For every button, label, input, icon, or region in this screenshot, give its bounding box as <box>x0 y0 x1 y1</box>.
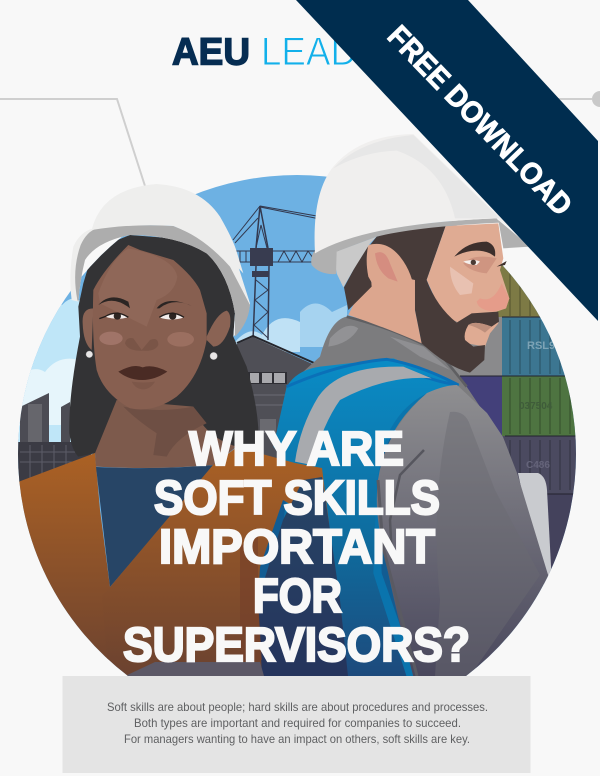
man nose <box>477 283 509 312</box>
container label RSL9: RSL9 <box>527 340 555 352</box>
woman earrings <box>86 351 217 360</box>
title line 5: SUPERVISORS? <box>123 619 470 672</box>
man inner ear <box>375 252 398 282</box>
woman ears <box>83 308 230 350</box>
ribbon: free download <box>296 0 598 321</box>
connector line right <box>550 91 600 107</box>
man helmet <box>311 134 530 274</box>
woman inner top <box>258 477 348 676</box>
intro text: Both types are important and required for companies to succeed. <box>134 716 461 730</box>
woman shirt <box>96 465 215 587</box>
title line 2: SOFT SKILLS <box>154 472 440 525</box>
man eyebrow <box>454 242 507 267</box>
woman helmet <box>70 184 250 337</box>
illustration: circular scene <box>0 134 600 690</box>
man eye <box>463 260 480 265</box>
man sleeve <box>376 385 548 676</box>
title line 3: IMPORTANT <box>159 521 435 574</box>
intro text <box>107 700 488 746</box>
logo: AEU: AEU <box>172 32 250 74</box>
woman head <box>70 184 250 468</box>
woman lips <box>118 366 167 380</box>
clipboard <box>518 473 552 585</box>
warehouse <box>236 335 314 458</box>
vest top edge <box>287 359 458 387</box>
man cheek highlight <box>450 267 473 295</box>
woman nose <box>125 338 158 351</box>
ribbon label: FREE DOWNLOAD <box>381 19 578 222</box>
container label 037504: 037504 <box>519 401 553 412</box>
crane <box>233 206 345 340</box>
woman jacket left <box>19 453 110 660</box>
man hair back <box>344 226 446 310</box>
vest reflective band <box>295 367 432 465</box>
man ear <box>367 244 415 300</box>
man beard <box>415 277 499 373</box>
title <box>123 423 470 672</box>
man head <box>311 134 530 373</box>
title line 4: FOR <box>253 570 342 623</box>
left buildings <box>16 393 91 482</box>
woman forehead highlight <box>98 248 177 327</box>
man torso base <box>259 438 400 626</box>
man neck <box>348 263 422 343</box>
woman eyes <box>99 312 184 320</box>
containers <box>450 266 576 584</box>
man eye socket <box>463 257 497 273</box>
woman eyebrows <box>98 297 192 308</box>
container label C486: C486 <box>526 460 550 471</box>
woman hair back <box>69 235 258 457</box>
man torso with vest <box>265 358 460 677</box>
intro text: Soft skills are about people; hard skills are about procedures and processes. <box>107 700 488 714</box>
woman jacket right <box>102 447 329 676</box>
intro panel <box>62 676 530 773</box>
intro text: For managers wanting to have an impact on others, soft skills are key. <box>124 732 470 746</box>
man sleeve inner blue <box>373 393 427 677</box>
man collar and shoulders <box>304 315 480 430</box>
logo: LEAD: LEAD <box>261 30 357 74</box>
man hat liner <box>333 237 377 287</box>
woman face <box>93 245 207 409</box>
woman neck <box>95 400 237 468</box>
title line 1: WHY ARE <box>189 423 404 476</box>
man lip <box>468 323 492 333</box>
man face <box>427 223 509 347</box>
scene background <box>18 175 576 676</box>
clouds <box>18 299 347 450</box>
logo <box>172 30 357 74</box>
woman cheeks <box>99 332 194 347</box>
connector line left <box>0 99 145 186</box>
woman neck shadow <box>123 407 207 457</box>
woman chin shadow <box>132 382 155 389</box>
lower jacket shadow <box>125 530 264 676</box>
